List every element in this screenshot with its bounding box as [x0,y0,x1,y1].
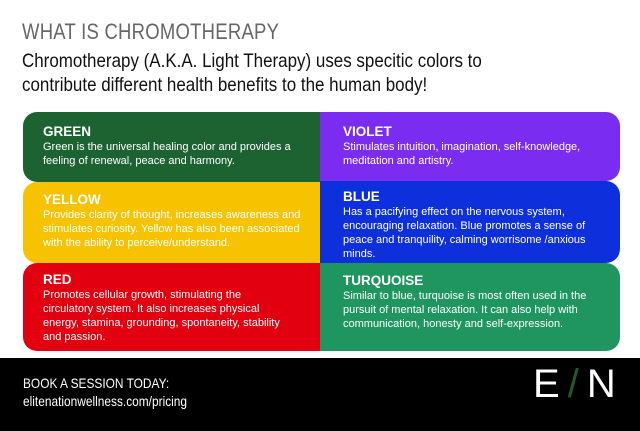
panel: turquoise: Similar to blue, turquoise is most often used in the pursuit of mental relaxation. It can also help with communication, honesty and self-expression. [343,290,586,330]
panel: red: circulatory system. It also increases physical [43,303,259,315]
panel: red: and passion. [43,331,105,343]
panel: blue [320,181,620,263]
panel: violet [320,112,620,181]
panel: green: GREEN [43,124,91,139]
panel: yellow [23,182,320,263]
call to action: BOOK A SESSION TODAY: [23,375,169,391]
panel: blue: BLUE [343,189,380,204]
panel: red: Promotes cellular growth, stimulating the [43,289,241,301]
panel: yellow: Provides clarity of thought, increases awareness and stimulates curiosity. Yellow has also been associated with the ability to perceive/understand. [43,209,300,249]
panel: turquoise [320,263,620,351]
panel: red: RED [43,272,72,287]
panel: yellow: YELLOW [43,192,101,207]
title: WHAT IS CHROMOTHERAPY [22,19,279,44]
panel: blue: Has a pacifying effect on the nervous system, encouraging relaxation. Blue promotes a sense of peace and tranquility, calming worrisome /anxious minds. [343,206,586,260]
panel: turquoise: TURQUOISE [343,273,423,288]
call to action: elitenationwellness.com/pricing [23,393,187,409]
panel: green [23,112,320,182]
panel: red [23,263,320,351]
call to action [23,375,187,409]
panel: violet: VIOLET [343,124,392,139]
subtitle: Chromotherapy (A.K.A. Light Therapy) uses specitic colors to contribute different health benefits to the human body! [22,50,482,96]
panel: red: energy, stamina, grounding, spontaneity, stability [43,317,280,329]
footer [0,358,640,431]
panel: violet: Stimulates intuition, imagination, self-knowledge, meditation and artistry. [343,141,580,167]
logo: E/N [533,362,618,406]
panel: green: Green is the universal healing color and provides a feeling of renewal, peace and harmony. [43,141,291,167]
